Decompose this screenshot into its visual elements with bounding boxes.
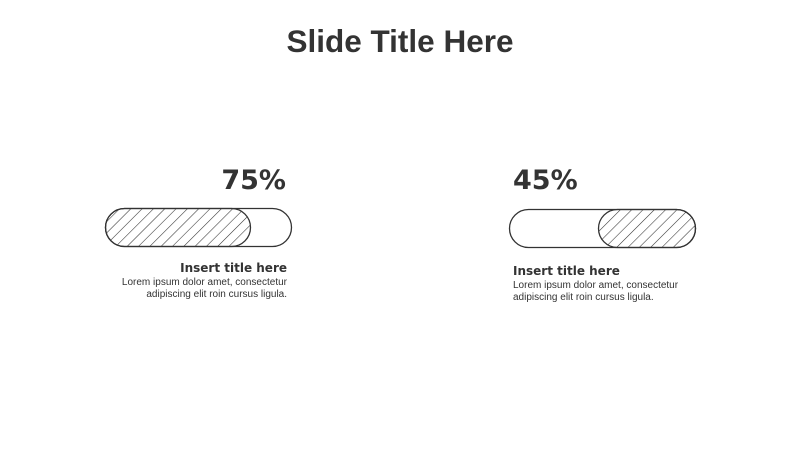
progress bar 45 [508,208,696,248]
text block: Insert title here [513,264,620,278]
progress bar 75 [104,208,292,248]
panel: right 45% [508,165,696,303]
text block: Lorem ipsum dolor amet, consectetur [122,277,287,288]
percent 75: 75% [221,165,286,196]
text block: adipiscing elit roin cursus ligula. [513,292,654,303]
panel: left 75% [104,165,292,300]
text block: Lorem ipsum dolor amet, consectetur [513,280,678,291]
text block [513,264,678,303]
text block [122,261,287,300]
text block: adipiscing elit roin cursus ligula. [146,289,287,300]
text block: Insert title here [180,261,287,275]
title: Slide Title Here [286,23,514,59]
percent 45: 45% [513,165,578,196]
